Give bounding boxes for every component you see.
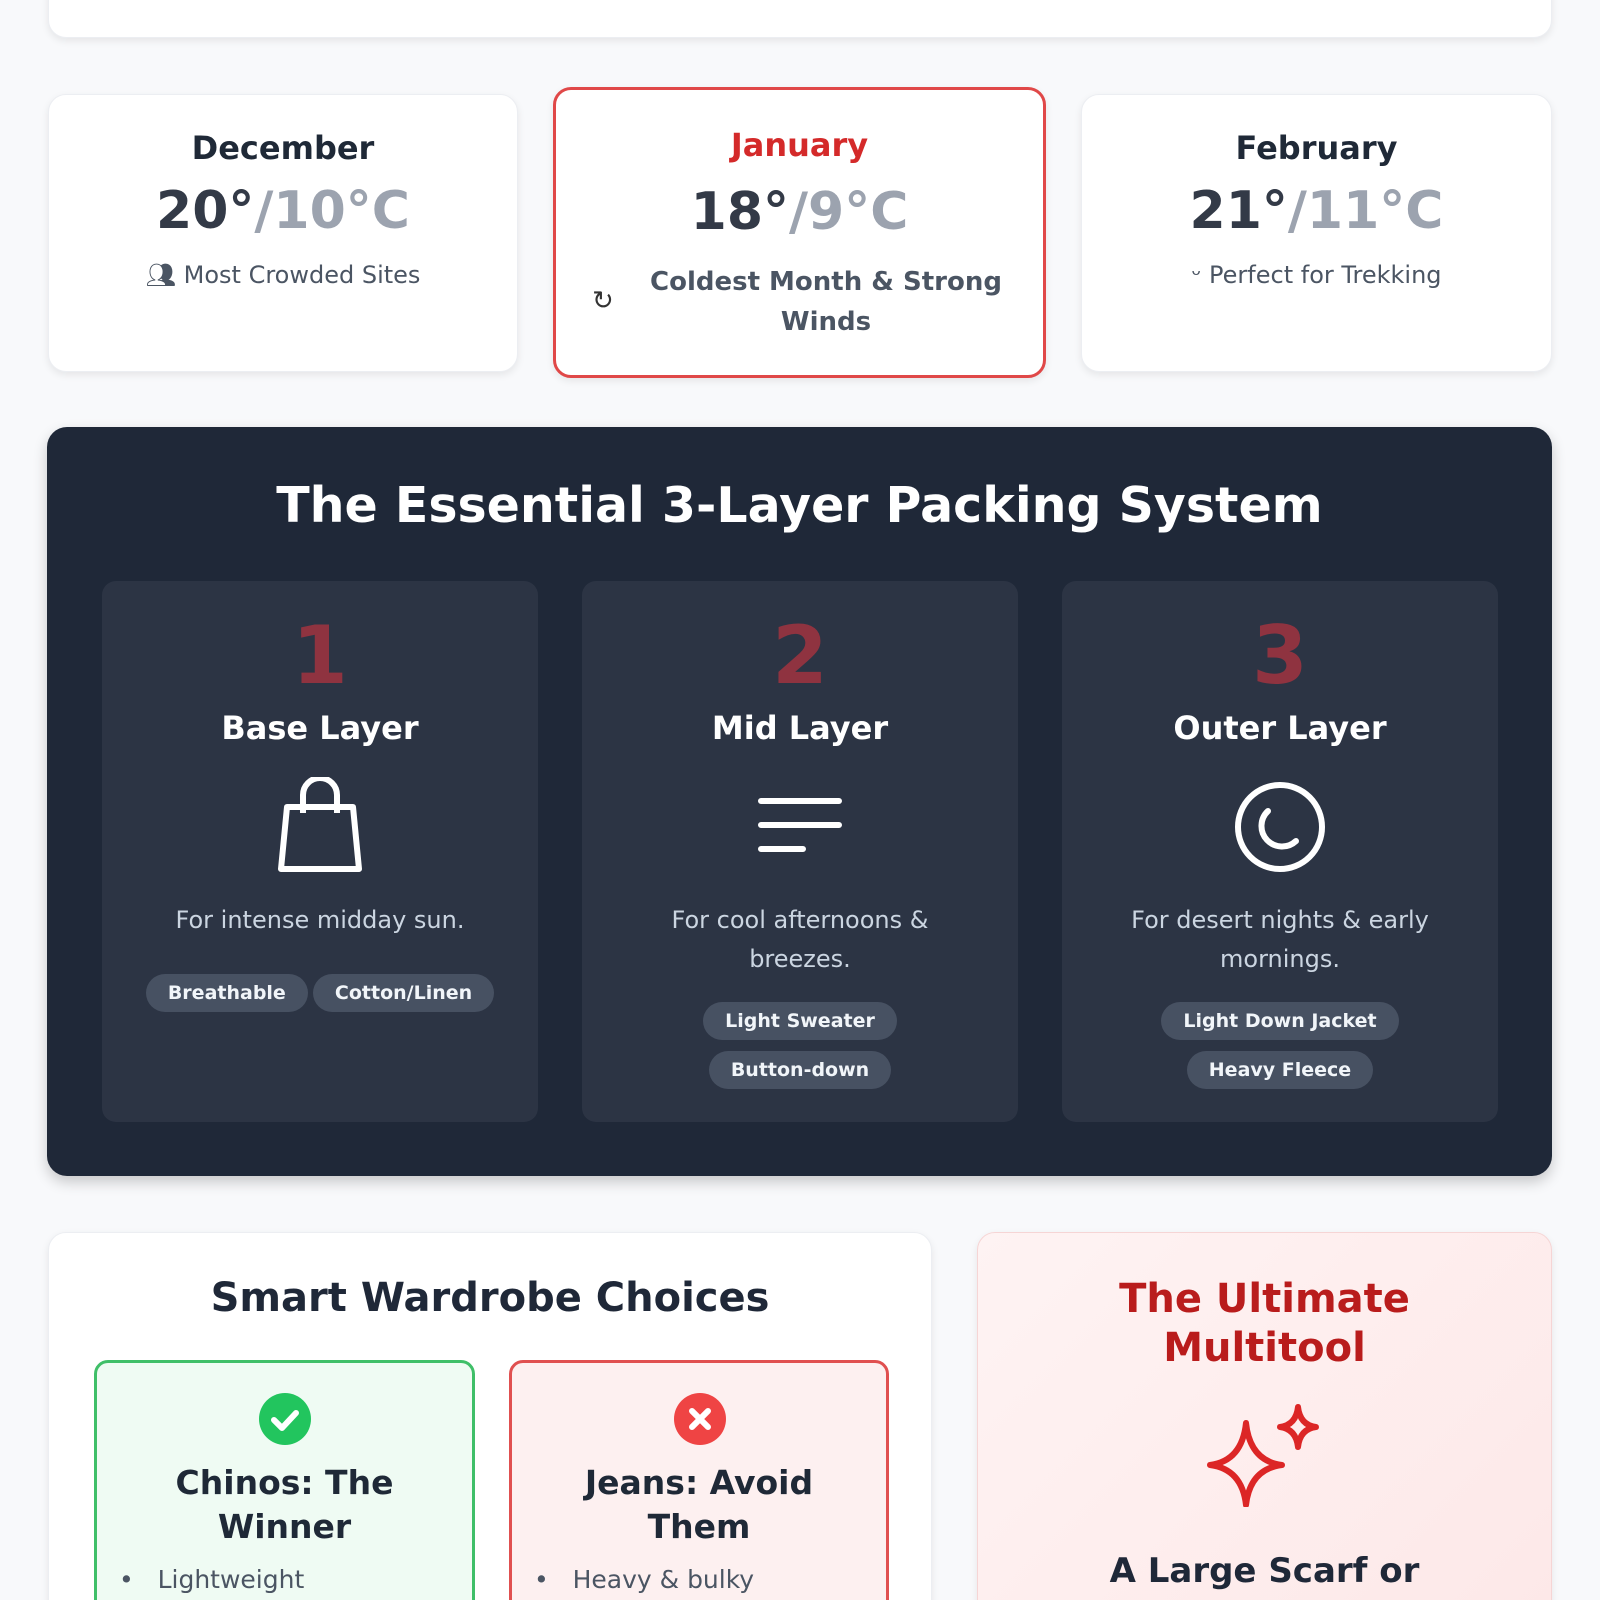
icon: cross [674, 1393, 726, 1445]
heading: Smart Wardrobe Choices [211, 1275, 769, 1321]
icon: circle [1235, 782, 1325, 872]
tags: Heavy Fleece [1209, 1059, 1351, 1081]
tags [703, 1002, 897, 1089]
month name: February [1236, 129, 1397, 167]
month name: December [192, 129, 374, 167]
layer title: Mid Layer [712, 709, 888, 747]
description: For desert nights & early mornings. [1131, 906, 1429, 973]
layer card 3 [1062, 581, 1498, 1122]
number: 3 [1252, 609, 1308, 702]
title: Chinos: The Winner [176, 1463, 393, 1546]
sub-card: chinos [94, 1360, 475, 1600]
icon: check [259, 1393, 311, 1445]
heading: The Essential 3-Layer Packing System [276, 477, 1323, 534]
description: For intense midday sun. [176, 906, 464, 934]
icon: sparkles [1207, 1404, 1319, 1507]
card: December [48, 94, 518, 372]
tags: Cotton/Linen [335, 982, 472, 1004]
layer card 2 [582, 581, 1018, 1122]
icon: bag [278, 777, 362, 872]
icon: wind: ↻ [592, 286, 614, 316]
month name: January [731, 126, 868, 164]
description: For cool afternoons & breezes. [672, 906, 928, 973]
heading: The Ultimate Multitool [1119, 1276, 1410, 1371]
layer title: Base Layer [221, 709, 419, 747]
panel: 3-layer packing system [47, 427, 1552, 1176]
note: coldest: Coldest Month & Strong Winds [650, 267, 1002, 337]
tags: Light Down Jacket [1183, 1010, 1377, 1032]
bullet: • Lightweight [119, 1565, 304, 1594]
number: 2 [772, 609, 828, 702]
card: February [1081, 94, 1552, 372]
layer card 1 [102, 581, 538, 1122]
number: 1 [292, 609, 348, 702]
icon: lines [758, 798, 842, 852]
note: crowded: 👥︎ Most Crowded Sites [146, 261, 420, 289]
temperature: 20°/10°C [156, 181, 410, 241]
temperature: 21°/11°C [1190, 181, 1443, 241]
panel: ultimate multitool [977, 1232, 1552, 1600]
title: Jeans: Avoid Them [585, 1463, 813, 1546]
tags: Button-down [731, 1059, 869, 1081]
tags [1161, 1002, 1399, 1089]
bullet: • Heavy & bulky [534, 1565, 754, 1594]
temperature: 18°/9°C [691, 182, 908, 242]
tags: Light Sweater [725, 1010, 875, 1032]
layer title: Outer Layer [1173, 709, 1387, 747]
tags: Breathable [168, 982, 286, 1004]
card: January highlighted [553, 87, 1046, 378]
note: trekking: ᵕ Perfect for Trekking [1191, 261, 1442, 289]
top card [48, 0, 1552, 38]
tags [146, 974, 494, 1012]
subheading: A Large Scarf or [1110, 1551, 1419, 1591]
sub-card: jeans [509, 1360, 889, 1600]
panel: smart wardrobe choices [48, 1232, 932, 1600]
